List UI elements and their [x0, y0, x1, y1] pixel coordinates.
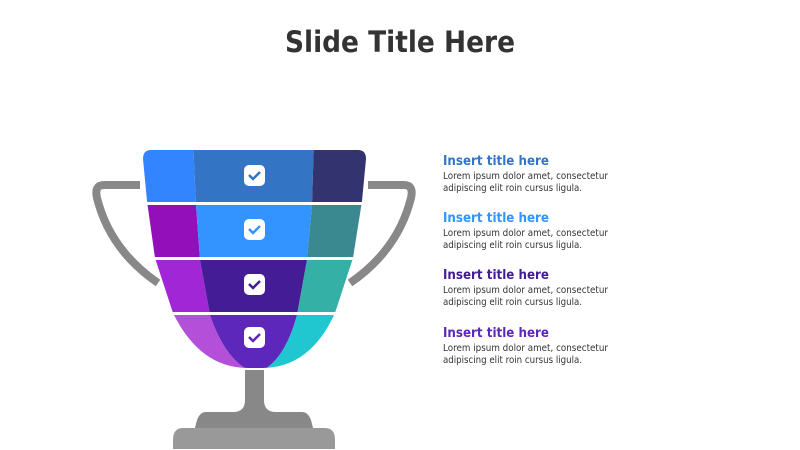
cup body	[143, 150, 366, 368]
stem and base	[173, 370, 335, 449]
trophy	[96, 148, 412, 449]
check icons	[244, 165, 265, 348]
text block 4	[443, 326, 609, 366]
text block 3	[443, 268, 609, 308]
text block 3: adipiscing elit roin cursus ligula.	[443, 297, 582, 308]
text block 3: Insert title here	[443, 268, 549, 283]
text block 2	[443, 211, 609, 251]
text block 3: Lorem ipsum dolor amet, consectetur	[443, 285, 609, 296]
text block 1: Insert title here	[443, 154, 549, 169]
title: Slide Title Here	[285, 25, 515, 59]
text block 1	[443, 154, 609, 194]
left handle	[96, 185, 158, 283]
right handle	[350, 185, 412, 283]
text block 4: Lorem ipsum dolor amet, consectetur	[443, 343, 609, 354]
text block 1: adipiscing elit roin cursus ligula.	[443, 183, 582, 194]
text block 2: Insert title here	[443, 211, 549, 226]
text block 4: Insert title here	[443, 326, 549, 341]
text block 2: Lorem ipsum dolor amet, consectetur	[443, 228, 609, 239]
text block 4: adipiscing elit roin cursus ligula.	[443, 355, 582, 366]
text block 2: adipiscing elit roin cursus ligula.	[443, 240, 582, 251]
text block 1: Lorem ipsum dolor amet, consectetur	[443, 171, 609, 182]
